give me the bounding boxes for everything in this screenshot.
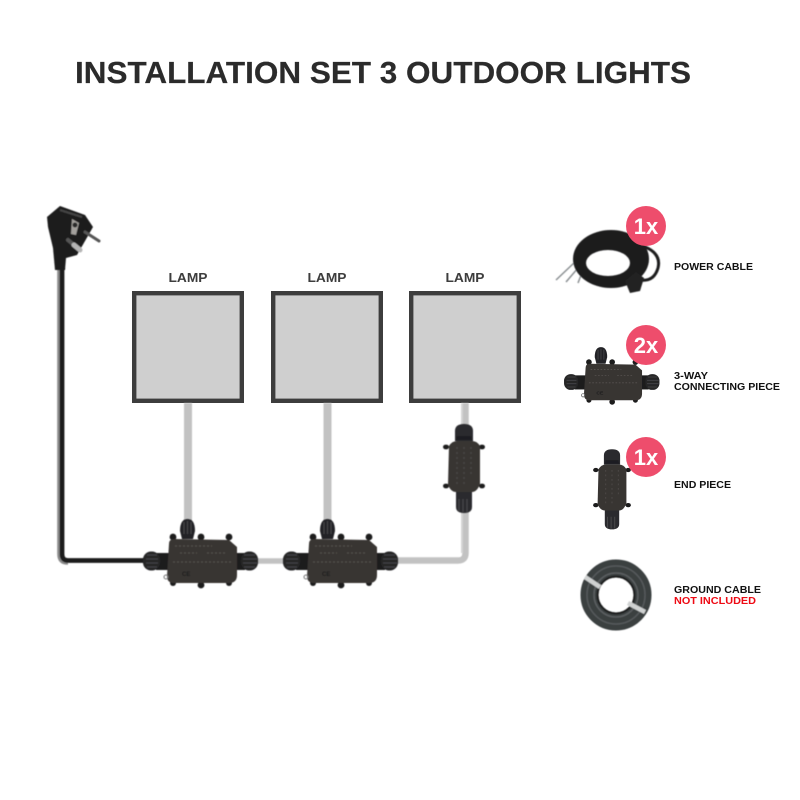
lamp 2 label: LAMP <box>308 270 347 285</box>
badge: 2x: 2x <box>634 333 659 358</box>
title: INSTALLATION SET 3 OUTDOOR LIGHTS <box>75 55 691 90</box>
connector: first 3-way junction <box>143 519 258 588</box>
lamp 1 label: LAMP <box>168 270 208 285</box>
label: not included: NOT INCLUDED <box>674 596 756 607</box>
icon: cable coil <box>556 230 659 293</box>
item: end piece <box>593 437 731 529</box>
lamp 2 <box>273 270 381 401</box>
item: 3-way connecting piece <box>564 325 780 405</box>
label: 3-way connecting piece: 3-WAY <box>674 371 708 382</box>
lamp 3 label: LAMP <box>446 270 485 285</box>
lamp 1 <box>134 270 242 401</box>
item: power cable <box>556 206 753 293</box>
label: power cable: POWER CABLE <box>674 262 753 273</box>
badge: 1x: 1x <box>634 214 659 239</box>
connector: second 3-way junction <box>283 519 398 588</box>
label: ground cable: GROUND CABLE <box>674 585 761 596</box>
label: 3-way connecting piece: CONNECTING PIECE <box>674 382 780 393</box>
lamp 3 <box>411 270 519 401</box>
power cable run <box>58 268 145 564</box>
icon: end piece <box>593 449 631 529</box>
badge: 1x <box>626 206 666 246</box>
connector: end piece on cable <box>443 424 485 513</box>
icon: power plug <box>47 206 99 270</box>
item: ground cable <box>585 566 761 624</box>
badge: 1x: 1x <box>634 445 659 470</box>
badge: 2x <box>626 325 666 365</box>
icon: junction box <box>564 347 659 405</box>
label: end piece: END PIECE <box>674 480 731 491</box>
grey lamp cables <box>188 403 466 561</box>
icon: ground cable coil <box>585 566 645 624</box>
